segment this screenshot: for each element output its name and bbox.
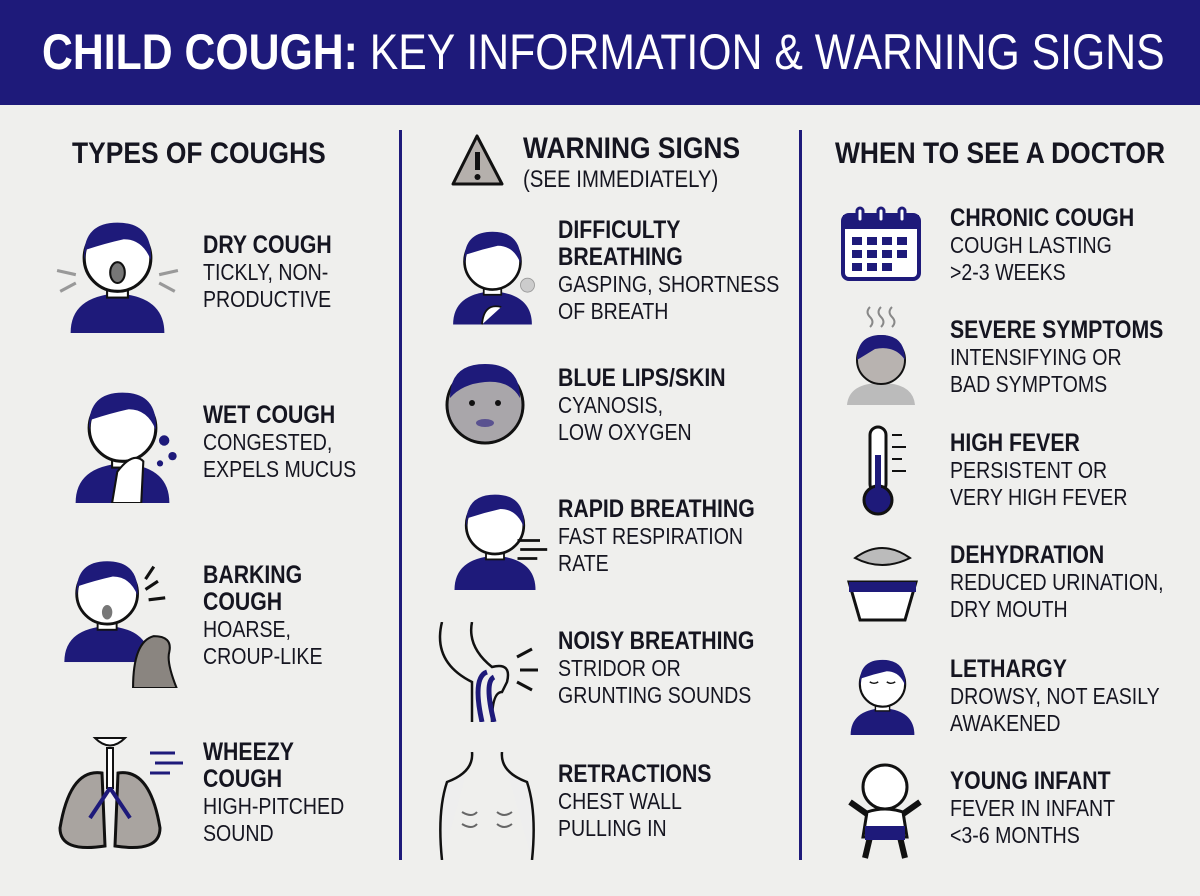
text: noisy breathing: STRIDOR OR bbox=[558, 655, 681, 681]
heading: warning signs: WARNING SIGNS bbox=[523, 132, 740, 165]
text: rapid breathing bbox=[558, 495, 755, 576]
text: retractions: CHEST WALL bbox=[558, 788, 682, 814]
text: rapid breathing: FAST RESPIRATION bbox=[558, 523, 743, 549]
text: severe symptoms: INTENSIFYING OR bbox=[950, 344, 1122, 370]
icon: wheezy lungs bbox=[58, 737, 183, 849]
header title bbox=[0, 0, 1200, 105]
text: difficulty breathing: BREATHING bbox=[558, 243, 683, 271]
text: young infant: <3-6 MONTHS bbox=[950, 822, 1080, 848]
text: chronic cough: CHRONIC COUGH bbox=[950, 204, 1134, 232]
text: difficulty breathing: OF BREATH bbox=[558, 298, 668, 324]
text: rapid breathing: RATE bbox=[558, 550, 609, 576]
heading: types of coughs: TYPES OF COUGHS bbox=[72, 137, 326, 170]
icon: severe symptoms bbox=[847, 306, 915, 405]
text: dry cough: TICKLY, NON- bbox=[203, 259, 328, 285]
text: high fever: HIGH FEVER bbox=[950, 429, 1080, 457]
text: blue lips: CYANOSIS, bbox=[558, 392, 663, 418]
text: blue lips bbox=[558, 364, 726, 445]
text: retractions bbox=[558, 760, 711, 841]
icon: difficulty breathing bbox=[453, 232, 535, 325]
icon: wet cough bbox=[76, 392, 177, 503]
text: high fever bbox=[950, 429, 1127, 510]
text: chronic cough: >2-3 WEEKS bbox=[950, 259, 1066, 285]
icon: dehydration bbox=[847, 547, 918, 622]
text: wet cough: CONGESTED, bbox=[203, 429, 332, 455]
heading: when to see a doctor: WHEN TO SEE A DOCTOR bbox=[835, 137, 1165, 170]
icon: noisy breathing bbox=[438, 622, 538, 722]
text: wet cough: WET COUGH bbox=[203, 401, 335, 429]
heading: warning signs bbox=[452, 132, 740, 193]
text: lethargy: DROWSY, NOT EASILY bbox=[950, 683, 1160, 709]
text: wheezy cough: SOUND bbox=[203, 820, 274, 846]
text: severe symptoms bbox=[950, 316, 1163, 397]
text: wet cough bbox=[203, 401, 356, 482]
text: wheezy cough bbox=[203, 738, 344, 846]
text: wheezy cough: COUGH bbox=[203, 765, 282, 793]
text: retractions: RETRACTIONS bbox=[558, 760, 711, 788]
text: difficulty breathing: GASPING, SHORTNESS bbox=[558, 271, 779, 297]
icon: barking cough bbox=[64, 561, 178, 688]
icon: warning triangle bbox=[452, 134, 504, 186]
text: barking cough: COUGH bbox=[203, 588, 282, 616]
text: dehydration bbox=[950, 541, 1164, 622]
text: wet cough: EXPELS MUCUS bbox=[203, 456, 356, 482]
text: young infant: YOUNG INFANT bbox=[950, 767, 1111, 795]
text: high fever: VERY HIGH FEVER bbox=[950, 484, 1127, 510]
text: difficulty breathing: DIFFICULTY bbox=[558, 216, 680, 244]
icon: rapid breathing bbox=[454, 494, 548, 590]
heading: warning signs: (SEE IMMEDIATELY) bbox=[523, 166, 718, 193]
text: lethargy: LETHARGY bbox=[950, 655, 1067, 683]
icon: dry cough bbox=[56, 222, 178, 333]
text: young infant bbox=[950, 767, 1115, 848]
text: young infant: FEVER IN INFANT bbox=[950, 795, 1115, 821]
text: retractions: PULLING IN bbox=[558, 815, 667, 841]
icon: thermometer bbox=[862, 426, 906, 516]
text: dehydration: DEHYDRATION bbox=[950, 541, 1104, 569]
text: wheezy cough: WHEEZY bbox=[203, 738, 294, 766]
text: lethargy: AWAKENED bbox=[950, 710, 1060, 736]
icon: retractions bbox=[439, 752, 535, 860]
text: lethargy bbox=[950, 655, 1160, 736]
text: barking cough: CROUP-LIKE bbox=[203, 643, 323, 669]
text: barking cough bbox=[203, 561, 323, 669]
text: chronic cough bbox=[950, 204, 1134, 285]
text: blue lips: BLUE LIPS/SKIN bbox=[558, 364, 726, 392]
text: noisy breathing: GRUNTING SOUNDS bbox=[558, 682, 751, 708]
text: severe symptoms: SEVERE SYMPTOMS bbox=[950, 316, 1163, 344]
text: dehydration: DRY MOUTH bbox=[950, 596, 1068, 622]
text: high fever: PERSISTENT OR bbox=[950, 457, 1107, 483]
icon: blue lips bbox=[446, 364, 524, 444]
text: noisy breathing bbox=[558, 627, 754, 708]
header title: CHILD COUGH: KEY INFORMATION & WARNING SIGNS bbox=[42, 24, 1165, 80]
text: noisy breathing: NOISY BREATHING bbox=[558, 627, 754, 655]
icon: lethargy bbox=[850, 660, 914, 735]
text: rapid breathing: RAPID BREATHING bbox=[558, 495, 755, 523]
text: wheezy cough: HIGH-PITCHED bbox=[203, 793, 344, 819]
text: blue lips: LOW OXYGEN bbox=[558, 419, 692, 445]
text: dry cough bbox=[203, 231, 332, 312]
text: dry cough: PRODUCTIVE bbox=[203, 286, 331, 312]
text: dry cough: DRY COUGH bbox=[203, 231, 332, 259]
text: barking cough: HOARSE, bbox=[203, 616, 291, 642]
text: dehydration: REDUCED URINATION, bbox=[950, 569, 1164, 595]
text: difficulty breathing bbox=[558, 216, 779, 324]
text: chronic cough: COUGH LASTING bbox=[950, 232, 1112, 258]
text: barking cough: BARKING bbox=[203, 561, 302, 589]
icon: calendar bbox=[841, 206, 921, 281]
icon: young infant bbox=[848, 764, 922, 859]
text: severe symptoms: BAD SYMPTOMS bbox=[950, 371, 1107, 397]
